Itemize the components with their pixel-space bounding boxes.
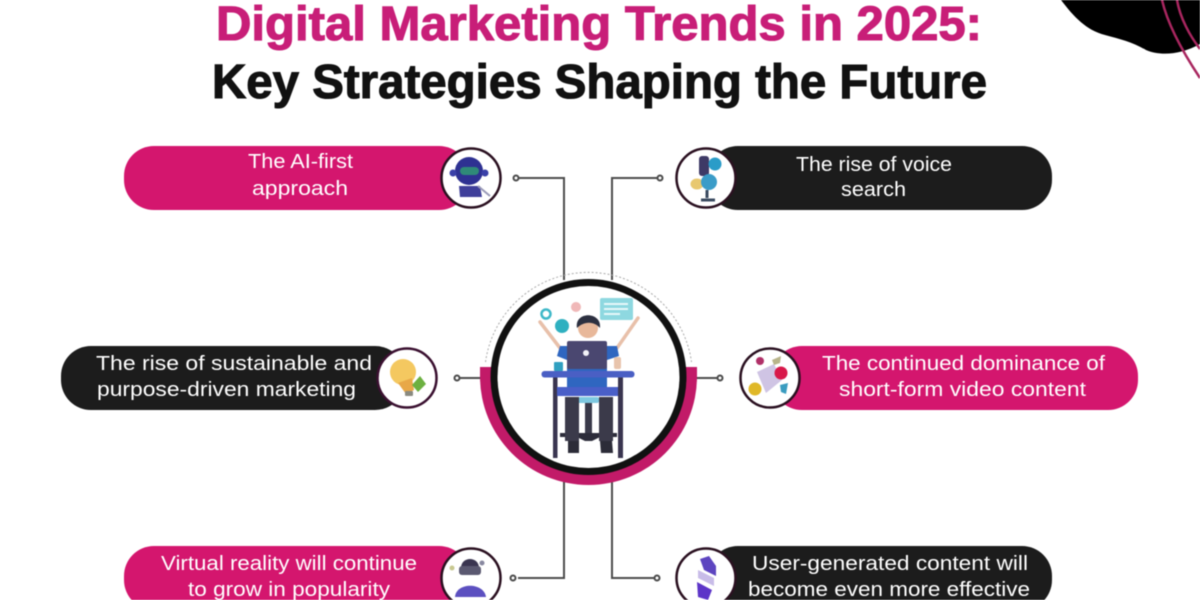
panel: sustainable marketing: purpose-driven marketing	[97, 379, 356, 401]
icon: light bulb	[390, 359, 426, 396]
panel: short-form video	[740, 346, 1138, 410]
icon: microphone	[690, 156, 722, 200]
central hub with illustration	[480, 272, 697, 485]
icon: content stack	[697, 556, 716, 600]
panel: AI-first approach	[124, 146, 500, 210]
panel: voice search: The rise of voice	[796, 154, 952, 176]
panel: user-generated content: User-generated content will	[752, 553, 1028, 575]
connector lines	[454, 176, 722, 580]
panel: sustainable marketing: The rise of sustainable and	[96, 353, 372, 375]
panel: sustainable marketing	[61, 346, 436, 410]
title: Key Strategies Shaping the Future	[212, 56, 987, 109]
icon: video content	[748, 356, 788, 396]
panel: virtual reality	[124, 546, 500, 600]
icon: robot	[450, 157, 490, 197]
panel: user-generated content	[676, 546, 1052, 600]
panel: AI-first approach: approach	[252, 178, 348, 200]
panel: short-form video: The continued dominance of	[822, 353, 1105, 375]
panel: virtual reality: Virtual reality will continue	[161, 553, 417, 575]
panel: AI-first approach: The AI-first	[248, 151, 353, 173]
panel: short-form video: short-form video content	[839, 379, 1087, 401]
title	[212, 0, 987, 109]
icon: VR headset	[450, 559, 486, 597]
decorative corner blob	[1061, 0, 1200, 78]
panel: voice search: search	[841, 179, 906, 201]
illustration: marketer at desk	[540, 298, 638, 458]
panel: voice search	[676, 146, 1052, 210]
